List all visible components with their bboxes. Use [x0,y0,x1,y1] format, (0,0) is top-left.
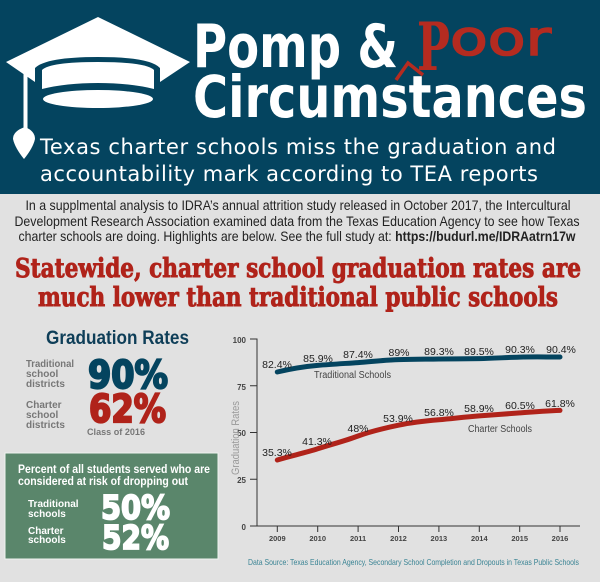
note: class of 2016: Class of 2016 [87,427,145,438]
subtitle: Texas charter schools miss the graduation and [39,135,556,159]
subtitle: accountability mark according to TEA reports [40,162,538,186]
series labels: Traditional Schools [314,370,391,381]
x axis labels: 2012 [390,534,407,543]
x axis labels: 2015 [511,534,528,543]
panel: at risk [5,453,218,559]
x axis labels: 2011 [350,534,366,543]
label: charter districts: Charter [26,400,62,411]
data labels: traditional: 90.3% [505,344,535,356]
label: traditional schools: schools [28,509,66,520]
data labels: charter: 61.8% [545,398,575,410]
icon: graduation cap [6,17,190,159]
title insert: Poor [417,8,551,86]
data labels: traditional: 85.9% [303,353,333,365]
caret mark [396,63,423,80]
intro paragraph: charter schools are doing. Highlights are below. See the full study at: https://budurl.me/IDRAatrn17w [18,228,576,244]
stat: 50%: 50% [101,488,170,527]
label: traditional districts: school [26,369,58,380]
y axis tick labels: 25 [237,476,247,485]
data labels: traditional: 89.5% [464,346,494,358]
label: traditional districts: Traditional [26,359,74,370]
label: traditional districts: districts [26,379,65,390]
y axis tick labels: 50 [237,429,247,438]
stat: 52%: 52% [102,518,169,557]
stat: 62%: 62% [89,387,166,431]
series labels: Charter Schools [468,424,532,435]
x axis labels: 2010 [309,534,326,543]
title insert: Poor: oor [450,11,551,67]
x axis labels: 2013 [431,534,447,543]
label: charter schools: schools [28,535,66,546]
data labels: charter: 48% [347,423,369,435]
y axis tick labels [233,336,247,532]
y axis tick labels: 100 [233,336,247,345]
y axis tick labels: 0 [242,523,247,532]
data labels: traditional: 90.4% [546,344,576,356]
title insert: Poor: P [417,8,450,86]
data labels: traditional [262,344,576,371]
x axis labels: 2014 [471,534,488,543]
headline [15,254,581,313]
series: charter schools [277,410,560,460]
label: traditional schools: Traditional [28,499,79,510]
line chart [230,336,580,567]
label: charter districts: districts [26,420,65,431]
panel: graduation rates [26,328,189,438]
stat: 90%: 90% [88,353,168,397]
y axis title: Graduation Rates [230,401,242,475]
panel heading: Percent of all students served who are [18,464,210,476]
data labels: charter: 60.5% [505,400,535,412]
label: charter schools: Charter [28,526,64,537]
data labels: charter: 53.9% [383,413,413,425]
data labels: traditional: 82.4% [262,359,292,371]
heading: Graduation Rates [46,328,189,349]
data labels: charter: 35.3% [262,447,292,459]
title: Pomp &: Pomp & [193,12,398,82]
x axis labels: 2016 [552,534,568,543]
x axis labels [269,534,568,543]
subtitle [39,135,556,186]
label: charter schools [28,526,66,546]
panel heading [18,464,210,488]
data labels: charter [262,398,575,459]
data labels: charter: 58.9% [464,403,494,415]
data labels: charter: 41.3% [302,436,332,448]
data labels: traditional: 89% [388,347,410,359]
series labels [314,370,532,435]
data labels: traditional: 87.4% [343,349,373,361]
header banner [0,0,600,194]
series: traditional schools [277,357,560,372]
label: charter districts [26,400,65,431]
label: charter districts: school [26,410,58,421]
data labels: charter: 56.8% [424,407,454,419]
y axis tick labels: 75 [237,383,247,392]
label: traditional districts [26,359,74,390]
label: traditional schools [28,499,79,520]
panel heading: considered at risk of dropping out [18,476,188,488]
x axis labels: 2009 [269,534,286,543]
axes [250,339,580,532]
intro paragraph [14,197,580,244]
data labels: traditional: 89.3% [424,346,454,358]
